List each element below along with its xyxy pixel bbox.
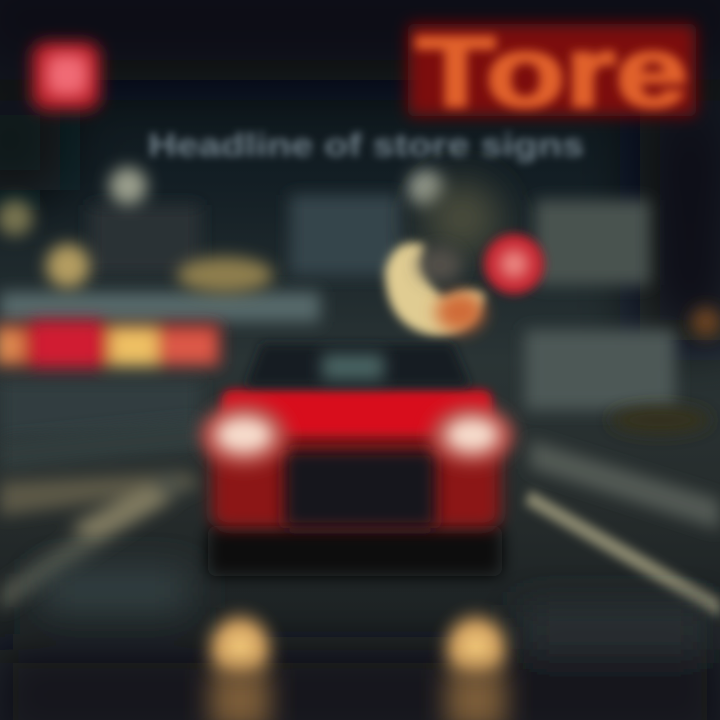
blurred heading line: Headline of store signs (148, 127, 584, 163)
car lower body (212, 430, 500, 528)
sign: Tore: Tore (416, 16, 688, 128)
wet road foreground (0, 572, 720, 720)
left road reflection (198, 604, 282, 720)
street lights and background glows (0, 167, 720, 434)
figure with round red sign (385, 182, 544, 336)
right road reflection (434, 604, 518, 720)
pale strip above left lights (0, 292, 320, 322)
right road line (525, 490, 720, 618)
car hood (222, 390, 492, 436)
left headlight (200, 403, 288, 467)
car roof and windows (246, 344, 470, 386)
car shadow (208, 526, 502, 576)
road surface markings (0, 420, 720, 612)
dark upper corners (0, 0, 720, 340)
red car (200, 344, 514, 576)
right headlight (430, 405, 514, 465)
background buildings (0, 195, 675, 440)
car grille (284, 450, 436, 528)
sign: red square top left (32, 42, 100, 110)
left red and yellow light strip (0, 320, 220, 368)
